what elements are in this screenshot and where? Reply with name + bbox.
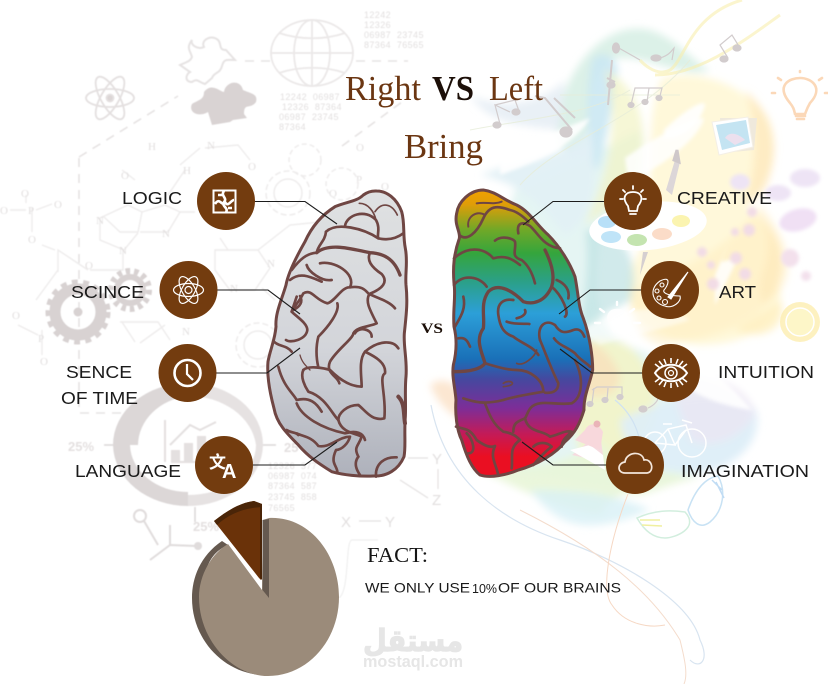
number blocks: 12242: [364, 10, 391, 20]
number blocks: 76565: [268, 503, 295, 513]
node: sense of time: [158, 344, 216, 402]
label: logic: LOGIC: [122, 188, 182, 208]
label: sense of time: [61, 362, 138, 408]
chemical structures: O: [0, 205, 8, 217]
icon: white lightbulb: [595, 302, 640, 331]
dashed connector lines: [79, 61, 408, 413]
label: sense of time: OF TIME: [61, 388, 138, 408]
icon: music notes: [493, 35, 741, 412]
chemical structures: N: [267, 258, 275, 270]
node: language: [195, 436, 253, 494]
axes labels: X: [341, 514, 351, 531]
icon: wings: [637, 476, 724, 538]
chemical structures: H: [183, 165, 191, 177]
label: imagination: IMAGINATION: [681, 461, 809, 481]
fact text: [365, 580, 621, 596]
chemical structures: N: [207, 140, 215, 152]
label: art: ART: [719, 282, 756, 302]
chemical structures: [0, 140, 389, 368]
node: creative: [604, 172, 662, 230]
chemical structures: N: [96, 215, 104, 227]
icon: paint palette: [587, 196, 709, 256]
icon: lightbulb: [620, 186, 646, 214]
chemical structures: P: [356, 174, 362, 186]
right brain (rainbow): [453, 190, 593, 476]
number blocks: 87364: [279, 122, 306, 132]
number blocks: 06987 074: [268, 471, 317, 481]
vs label: VS: [421, 321, 443, 337]
icon: translate: [209, 448, 236, 483]
small dot markers: [134, 510, 202, 560]
icon: photo frames: [712, 117, 757, 155]
icon: atom: [174, 274, 204, 306]
icon: translate: A: [222, 461, 236, 483]
fact text: OF OUR BRAINS: [498, 580, 621, 596]
label: sense of time: SENCE: [66, 362, 132, 382]
icon: bicycle: [644, 420, 706, 457]
purple paint blobs: [697, 169, 820, 290]
leader lines: [216, 202, 643, 465]
chemical structures: O: [40, 356, 48, 368]
donut chart with bars: 25%: [193, 519, 219, 534]
axes labels: [339, 451, 442, 598]
icon: globe: [271, 20, 353, 86]
fact text: WE ONLY USE: [365, 580, 470, 596]
chemical structures: O: [248, 161, 256, 173]
number blocks: 12326: [364, 20, 391, 30]
pie slice: 10 percent: [214, 501, 262, 580]
donut chart with bars: 25%: [68, 439, 94, 454]
chemical structures: O: [28, 234, 36, 246]
title: VS: [432, 69, 474, 108]
chemical structures: O: [54, 199, 62, 211]
title: [345, 69, 543, 166]
left brain (grey): [268, 191, 407, 477]
label: intuition: INTUITION: [718, 362, 814, 382]
background: grey science watermark: [0, 10, 442, 598]
number blocks: 23745 858: [268, 492, 317, 502]
number blocks: 12326 87364: [282, 102, 342, 112]
icon: puzzle outline: [180, 38, 235, 84]
node: imagination: [606, 436, 664, 494]
icon: lightbulb orange: [772, 71, 828, 119]
icon: atom: [86, 73, 134, 123]
node: logic: [197, 172, 255, 230]
chemical structures: O: [356, 142, 364, 154]
donut chart with bars: 25: [284, 440, 298, 455]
chemical structures: O: [85, 260, 93, 272]
pie side wall: [192, 541, 268, 676]
title: Right: [345, 69, 421, 108]
fact heading: FACT:: [367, 543, 428, 567]
watermark: mostaql: [363, 624, 463, 671]
fact text: 10%: [472, 581, 497, 596]
number blocks: 06987 23745: [279, 112, 339, 122]
icon: cloud: [619, 453, 652, 473]
pie inner wall: [262, 519, 269, 598]
icon: cake: [570, 420, 605, 470]
title: Bring: [404, 127, 483, 166]
chemical structures: P: [28, 205, 34, 217]
icon: paint brush behind palette: [640, 150, 680, 275]
number blocks: [268, 10, 424, 513]
chemical structures: O: [121, 170, 129, 182]
icon: gears: [50, 144, 358, 367]
icon: sun: [780, 302, 820, 342]
watermark: mostaql: مستقل: [363, 624, 463, 659]
chemical structures: O: [381, 181, 389, 193]
chemical structures: N: [230, 283, 238, 295]
chemical structures: N: [182, 326, 190, 338]
icon: puzzle filled: [191, 83, 256, 125]
number blocks: 87364 587: [268, 481, 317, 491]
number blocks: 06987 23745: [364, 30, 424, 40]
label: creative: CREATIVE: [677, 188, 772, 208]
icon: puzzle square: [214, 190, 236, 212]
pie chart: 10 percent: [192, 501, 339, 676]
donut chart with bars: [68, 383, 298, 534]
title: Left: [489, 69, 543, 108]
icon: translate: 文: [209, 448, 226, 473]
label: language: LANGUAGE: [75, 461, 181, 481]
axes labels: Y: [432, 451, 442, 468]
icon: clock: [174, 360, 200, 386]
chemical structures: P: [38, 333, 44, 345]
background: colourful creative splash: [430, 0, 828, 684]
watermark: mostaql: mostaql.com: [363, 652, 463, 671]
icon: eye: [655, 358, 687, 388]
node: art: [641, 261, 699, 319]
chemical structures: N: [119, 245, 127, 257]
node: intuition: [642, 344, 700, 402]
axes labels: Z: [432, 492, 441, 509]
icon: palette and brush: [653, 272, 688, 307]
number blocks: 87364 76565: [364, 40, 424, 50]
label: science: SCINCE: [71, 282, 144, 302]
number blocks: 12326 377: [268, 461, 317, 471]
pie body: [199, 518, 339, 676]
chemical structures: O: [329, 188, 337, 200]
node: science: [160, 261, 218, 319]
chemical structures: O: [21, 188, 29, 200]
axes labels: Y: [385, 514, 395, 531]
chemical structures: N: [162, 228, 170, 240]
chemical structures: O: [12, 310, 20, 322]
number blocks: 12242 06987: [280, 92, 340, 102]
chemical structures: H: [148, 141, 156, 153]
